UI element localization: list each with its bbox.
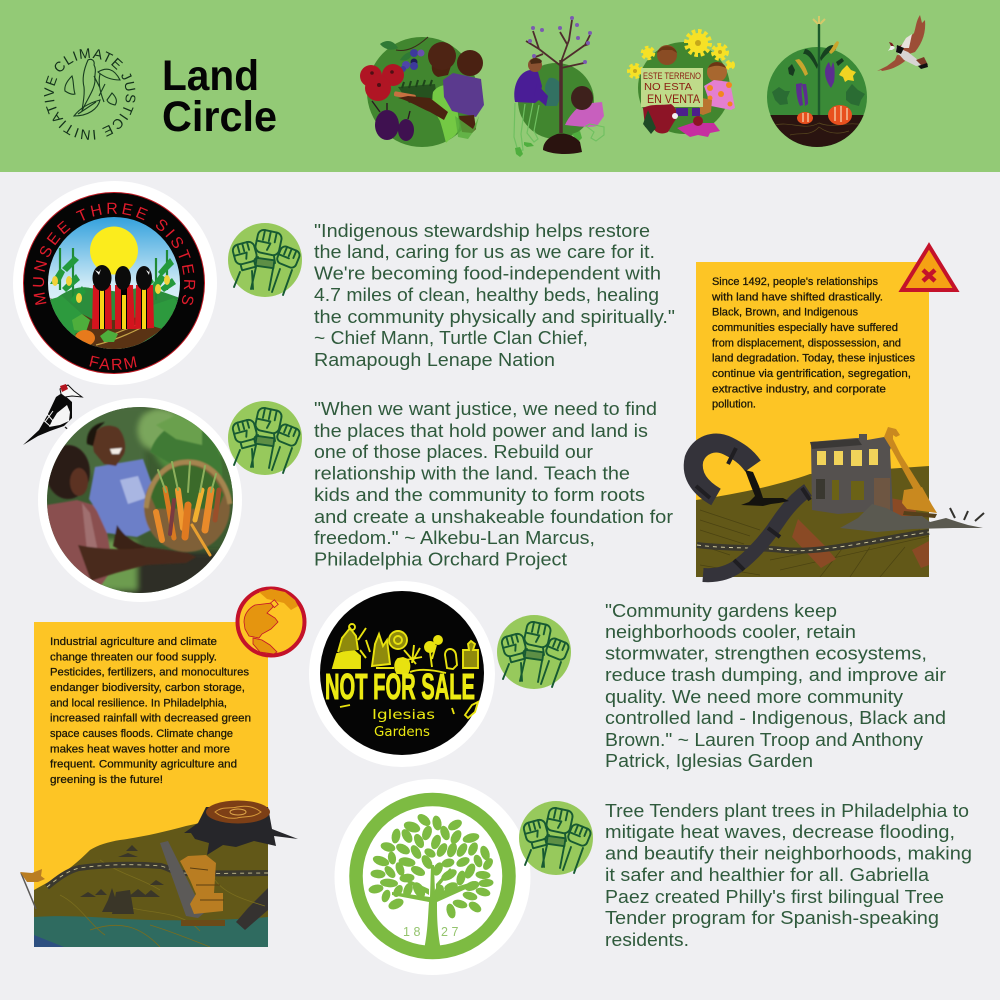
founding year: 18 bbox=[403, 925, 424, 939]
tree leaves bbox=[368, 812, 494, 919]
quote: Alkebu-Lan Marcus: Philadelphia Orchard Project bbox=[314, 550, 567, 570]
quote: Alkebu-Lan Marcus: one of those places. Rebuild our bbox=[314, 442, 593, 462]
quote: Alkebu-Lan Marcus: relationship with the land. Teach the bbox=[314, 464, 630, 484]
panel: climate change and agriculture bbox=[20, 588, 304, 947]
quote: Lauren Troop and Anthony Patrick: "Community gardens keep bbox=[605, 601, 837, 621]
not for sale lettering: NOT FOR SALE bbox=[325, 666, 475, 707]
text: Tree Tenders bbox=[605, 801, 972, 950]
photo: farmers with carrot basket bbox=[38, 398, 242, 602]
panel text: frequent. Community agriculture and bbox=[50, 759, 237, 771]
icon: raised fists 1 bbox=[228, 223, 302, 297]
quote: Alkebu-Lan Marcus: and create a unshakeable foundation for bbox=[314, 507, 673, 527]
panel text: land degradation. Today, these injustices bbox=[712, 353, 916, 365]
quote: Chief Mann: Ramapough Lenape Nation bbox=[314, 350, 555, 370]
globe icon bbox=[238, 588, 304, 656]
panel text: Black, Brown, and Indigenous bbox=[712, 307, 859, 319]
text: Tree Tenders: Paez created Philly's first bilingual Tree bbox=[605, 887, 944, 907]
quote: Alkebu-Lan Marcus: "When we want justice, we need to find bbox=[314, 399, 657, 419]
panel text: with land have shifted drastically. bbox=[711, 291, 883, 303]
text: Tree Tenders: and beautify their neighborhoods, making bbox=[605, 844, 972, 864]
landscape bbox=[696, 466, 930, 577]
illustration: este terreno no esta en venta: NO ESTA bbox=[644, 82, 692, 93]
quote: Chief Mann: the land, caring for us as we care for it. bbox=[314, 242, 655, 262]
badge: Munsee Three Sisters Farm bbox=[13, 181, 217, 385]
quote: Alkebu-Lan Marcus: kids and the community to form roots bbox=[314, 485, 645, 505]
tree trunk and branches bbox=[392, 865, 477, 950]
illustration: three sisters corn beans squash bbox=[767, 16, 867, 147]
panel text bbox=[50, 636, 251, 786]
illustration: planting a tree bbox=[514, 16, 604, 157]
quote: Chief Mann: the community physically and spiritually." bbox=[314, 307, 675, 327]
panel text: change threaten our food supply. bbox=[50, 651, 217, 663]
illustration: este terreno no esta en venta: ESTE TERRENO bbox=[643, 71, 701, 82]
yellow doodles bbox=[333, 624, 478, 718]
quote: Lauren Troop and Anthony Patrick: neighborhoods cooler, retain bbox=[605, 622, 856, 642]
pipeline bbox=[693, 443, 810, 575]
ruined building bbox=[810, 434, 893, 516]
iglesias gardens lettering: Iglesias bbox=[372, 707, 435, 723]
logo: Climate Justice Initiative: CLIMATE JUSTICE INITIATIVE bbox=[44, 48, 136, 140]
iglesias gardens lettering bbox=[372, 707, 435, 740]
quote: Chief Mann: "Indigenous stewardship helps restore bbox=[314, 221, 650, 241]
panel text: pollution. bbox=[712, 399, 756, 411]
quote: Lauren Troop and Anthony Patrick: Brown." ~ Lauren Troop and Anthony bbox=[605, 730, 923, 750]
panel text: Since 1492, people's relationships bbox=[712, 276, 879, 288]
text: Tree Tenders: mitigate heat waves, decrease flooding, bbox=[605, 822, 955, 842]
oil spill bbox=[741, 470, 789, 506]
quote: Chief Mann: We're becoming food-independent with bbox=[314, 264, 661, 284]
three figures bbox=[92, 265, 154, 329]
illustration: este terreno no esta en venta bbox=[630, 33, 735, 137]
illustration: flying bird bbox=[877, 15, 928, 71]
panel text: extractive industry, and corporate bbox=[712, 383, 886, 395]
founding year bbox=[403, 925, 462, 939]
text: Tree Tenders: Tree Tenders plant trees in Philadelphia to bbox=[605, 801, 969, 821]
illustration: mother with child and harvest bbox=[360, 37, 484, 147]
text: Tree Tenders: residents. bbox=[605, 930, 689, 950]
tree stump bbox=[184, 800, 298, 855]
title: Land bbox=[162, 52, 259, 100]
iglesias gardens lettering: Gardens bbox=[374, 724, 430, 740]
panel text bbox=[711, 276, 916, 411]
illustration: woodpecker bbox=[23, 384, 82, 445]
panel text: Pesticides, fertilizers, and monocultures bbox=[50, 667, 250, 679]
icon: raised fists 3 bbox=[497, 615, 571, 689]
farm scene bbox=[48, 215, 180, 358]
quote: Lauren Troop and Anthony Patrick: controlled land - Indigenous, Black and bbox=[605, 708, 946, 728]
header band bbox=[0, 0, 1000, 172]
quote: Alkebu-Lan Marcus: the places that hold power and land is bbox=[314, 421, 648, 441]
quote: Chief Mann: ~ Chief Mann, Turtle Clan Chief, bbox=[314, 328, 588, 348]
title: Circle bbox=[162, 93, 277, 141]
quote: Lauren Troop and Anthony Patrick: quality. We need more community bbox=[605, 687, 903, 707]
panel text: makes heat waves hotter and more bbox=[50, 743, 230, 755]
quote: Lauren Troop and Anthony Patrick: Patrick, Iglesias Garden bbox=[605, 751, 813, 771]
panel: land injustice history bbox=[693, 246, 984, 577]
excavator bbox=[884, 427, 937, 518]
panel text: Industrial agriculture and climate bbox=[50, 636, 217, 648]
title bbox=[162, 52, 277, 141]
founding year: 27 bbox=[441, 925, 462, 939]
panel text: greening is the future! bbox=[50, 774, 163, 786]
felled tree and machine bbox=[160, 841, 225, 926]
panel text: increased rainfall with decreased green bbox=[50, 713, 251, 725]
quote: Lauren Troop and Anthony Patrick bbox=[605, 601, 946, 771]
panel text: endanger biodiversity, carbon storage, bbox=[50, 682, 245, 694]
quote: Chief Mann: 4.7 miles of clean, healthy beds, healing bbox=[314, 285, 659, 305]
panel text: from displacement, dispossession, and bbox=[712, 337, 901, 349]
arc lettering bbox=[32, 202, 196, 370]
panel text: continue via gentrification, segregation, bbox=[712, 368, 911, 380]
badge: Tree Tenders 1827 tree logo bbox=[334, 779, 530, 975]
arc lettering: FARM bbox=[89, 356, 137, 370]
quote: Chief Mann bbox=[314, 221, 675, 370]
flag bbox=[20, 869, 45, 909]
quote: Alkebu-Lan Marcus: freedom." ~ Alkebu-Lan Marcus, bbox=[314, 528, 595, 548]
quote: Alkebu-Lan Marcus bbox=[314, 399, 673, 570]
text: Tree Tenders: it safer and healthier for all. Gabriella bbox=[605, 865, 930, 885]
panel text: communities especially have suffered bbox=[712, 322, 898, 334]
illustration: este terreno no esta en venta: EN VENTA bbox=[647, 92, 700, 106]
rubble bbox=[840, 504, 983, 532]
quote: Lauren Troop and Anthony Patrick: stormwater, strengthen ecosystems, bbox=[605, 644, 927, 664]
panel text: and local resilience. In Philadelphia, bbox=[50, 697, 227, 709]
text: Tree Tenders: Tender program for Spanish-speaking bbox=[605, 908, 939, 928]
icon: raised fists 4 bbox=[519, 801, 593, 875]
farmland hill bbox=[34, 824, 268, 947]
badge: Not For Sale Iglesias Gardens bbox=[309, 581, 495, 767]
arc lettering: MUNSEE THREE SISTERS bbox=[32, 202, 196, 306]
warning triangle sign bbox=[902, 246, 956, 290]
quote: Lauren Troop and Anthony Patrick: reduce trash dumping, and improve air bbox=[605, 665, 946, 685]
icon: raised fists 2 bbox=[228, 401, 302, 475]
panel text: space causes floods. Climate change bbox=[50, 728, 233, 740]
